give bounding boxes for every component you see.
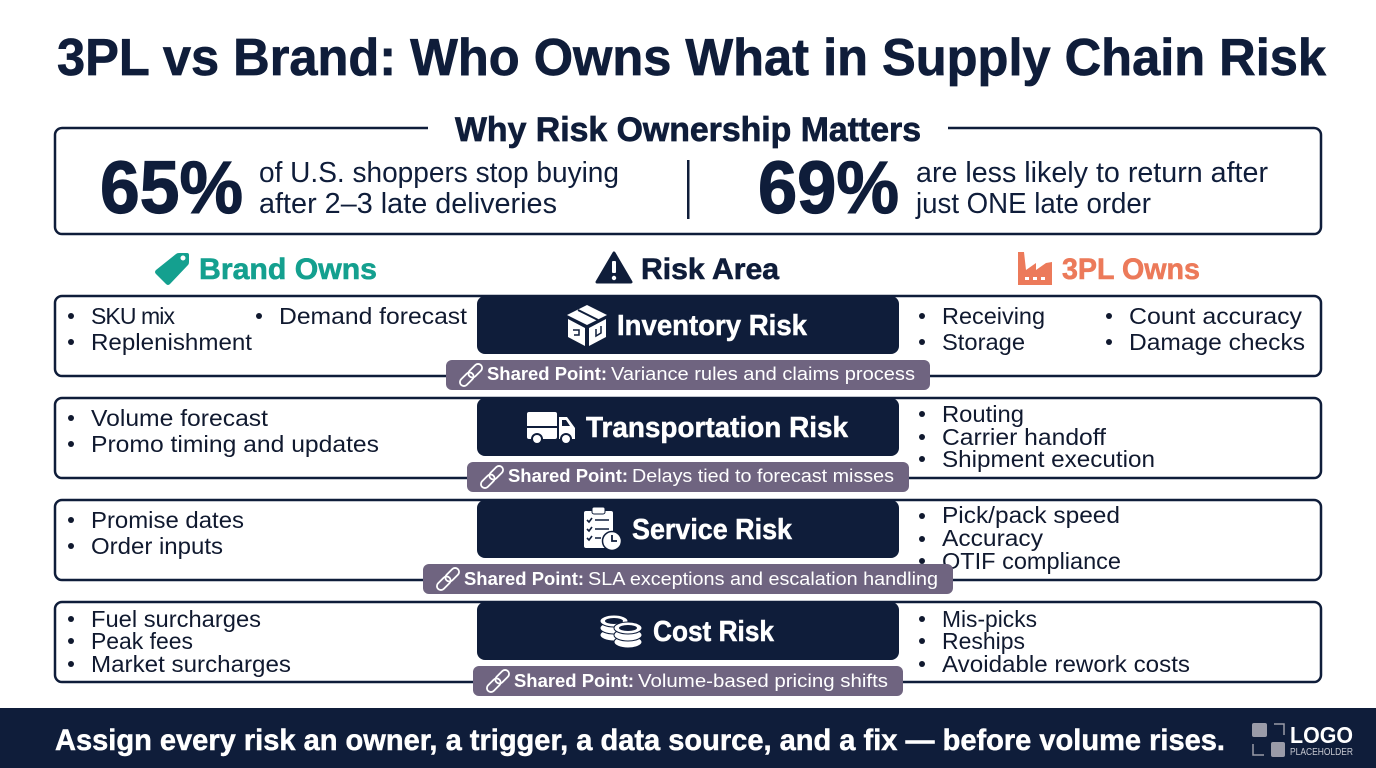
3PL list: inventory: Damage checks [1129, 329, 1305, 355]
brand list: cost: Peak fees [91, 628, 193, 654]
brand list: cost: Market surcharges [91, 651, 291, 677]
brand list: transportation [68, 405, 379, 457]
row: inventory risk [55, 296, 1321, 390]
3PL list: transportation: Routing [942, 401, 1024, 427]
3PL list: cost: Reships [942, 628, 1025, 654]
shared point: transportation [467, 462, 909, 492]
3PL list: inventory: Storage [942, 329, 1025, 355]
shared point: cost: Shared Point: [514, 671, 634, 691]
brand list: service: Order inputs [91, 533, 223, 559]
risk label: cost risk: Cost Risk [653, 616, 775, 648]
risk label: inventory risk [477, 296, 899, 354]
risk label: service risk [477, 500, 899, 558]
risk label: transportation risk: Transportation Risk [586, 412, 849, 444]
logo placeholder: PLACEHOLDER [1290, 747, 1353, 758]
row: service risk [55, 500, 1321, 594]
3PL list: transportation [919, 401, 1155, 472]
icon: link [435, 566, 461, 592]
row: cost risk [55, 602, 1321, 696]
icon: warning triangle [597, 253, 631, 282]
brand list: transportation: Promo timing and updates [91, 431, 379, 457]
brand list: transportation: Volume forecast [91, 405, 269, 431]
shared point: service: SLA exceptions and escalation handling [588, 569, 938, 589]
brand list: cost: Fuel surcharges [91, 606, 261, 632]
3PL list: inventory [919, 303, 1305, 355]
column heading: 3PL owns: 3PL Owns [1062, 253, 1200, 286]
stat text: 65% description: of U.S. shoppers stop buying [259, 157, 619, 189]
icon: price tag [155, 253, 189, 285]
icon: box [567, 305, 607, 346]
risk label: cost risk [477, 602, 899, 660]
logo placeholder [1252, 722, 1353, 758]
logo placeholder: LOGO [1290, 722, 1353, 748]
footer banner [0, 708, 1376, 768]
3PL list: inventory: Receiving [942, 303, 1045, 329]
shared point: service [423, 564, 953, 594]
brand list: inventory [68, 303, 468, 355]
3PL list: service [919, 502, 1121, 574]
stat text: 69% description: just ONE late order [915, 188, 1151, 220]
stat: 65%: 65% [100, 146, 243, 229]
column heading: risk area: Risk Area [641, 253, 779, 286]
shared point: inventory [446, 360, 930, 390]
shared point: transportation: Delays tied to forecast misses [632, 466, 894, 486]
panel: why risk ownership matters [55, 111, 1321, 234]
3PL list: transportation: Shipment execution [942, 446, 1155, 472]
title: 3PL vs Brand: Who Owns What in Supply Chain Risk [57, 29, 1326, 87]
row: transportation risk [55, 398, 1321, 492]
icon: truck [527, 412, 575, 444]
shared point: cost: Volume-based pricing shifts [638, 671, 888, 691]
shared point: transportation: Shared Point: [508, 466, 628, 486]
risk label: inventory risk: Inventory Risk [617, 310, 808, 342]
3PL list: inventory: Count accuracy [1129, 303, 1303, 329]
brand list: service [68, 507, 244, 559]
brand list: cost [68, 606, 291, 677]
3PL list: transportation: Carrier handoff [942, 424, 1107, 450]
icon: link [479, 464, 505, 490]
3PL list: service: OTIF compliance [942, 548, 1121, 574]
heading: why risk ownership matters: Why Risk Ownership Matters [455, 111, 921, 149]
shared point: cost [473, 666, 903, 696]
3PL list: cost [919, 606, 1190, 677]
shared point: inventory: Variance rules and claims process [611, 364, 915, 384]
icon: coins [600, 615, 642, 648]
risk label: service risk: Service Risk [632, 514, 793, 546]
brand list: service: Promise dates [91, 507, 244, 533]
icon: link [485, 668, 511, 694]
icon: link [458, 362, 484, 388]
icon: factory [1018, 252, 1052, 285]
stat text: 69% description: are less likely to return after [916, 157, 1268, 189]
shared point: service: Shared Point: [464, 569, 584, 589]
stat text: 65% description: after 2–3 late deliveries [259, 188, 557, 220]
risk label: transportation risk [477, 398, 899, 456]
3PL list: cost: Mis-picks [942, 606, 1037, 632]
brand list: inventory: SKU mix [91, 303, 176, 329]
3PL list: service: Pick/pack speed [942, 502, 1120, 528]
3PL list: cost: Avoidable rework costs [942, 651, 1190, 677]
brand list: inventory: Demand forecast [279, 303, 468, 329]
stat text: 69% description [915, 157, 1268, 220]
shared point: inventory: Shared Point: [487, 364, 607, 384]
icon: clipboard with clock [584, 507, 622, 550]
column heading: brand owns: Brand Owns [199, 253, 377, 286]
stat: 69%: 69% [758, 146, 899, 229]
brand list: inventory: Replenishment [91, 329, 253, 355]
stat text: 65% description [259, 157, 619, 220]
footer text: Assign every risk an owner, a trigger, a data source, and a fix — before volume rises. [55, 724, 1225, 757]
3PL list: service: Accuracy [942, 525, 1044, 551]
